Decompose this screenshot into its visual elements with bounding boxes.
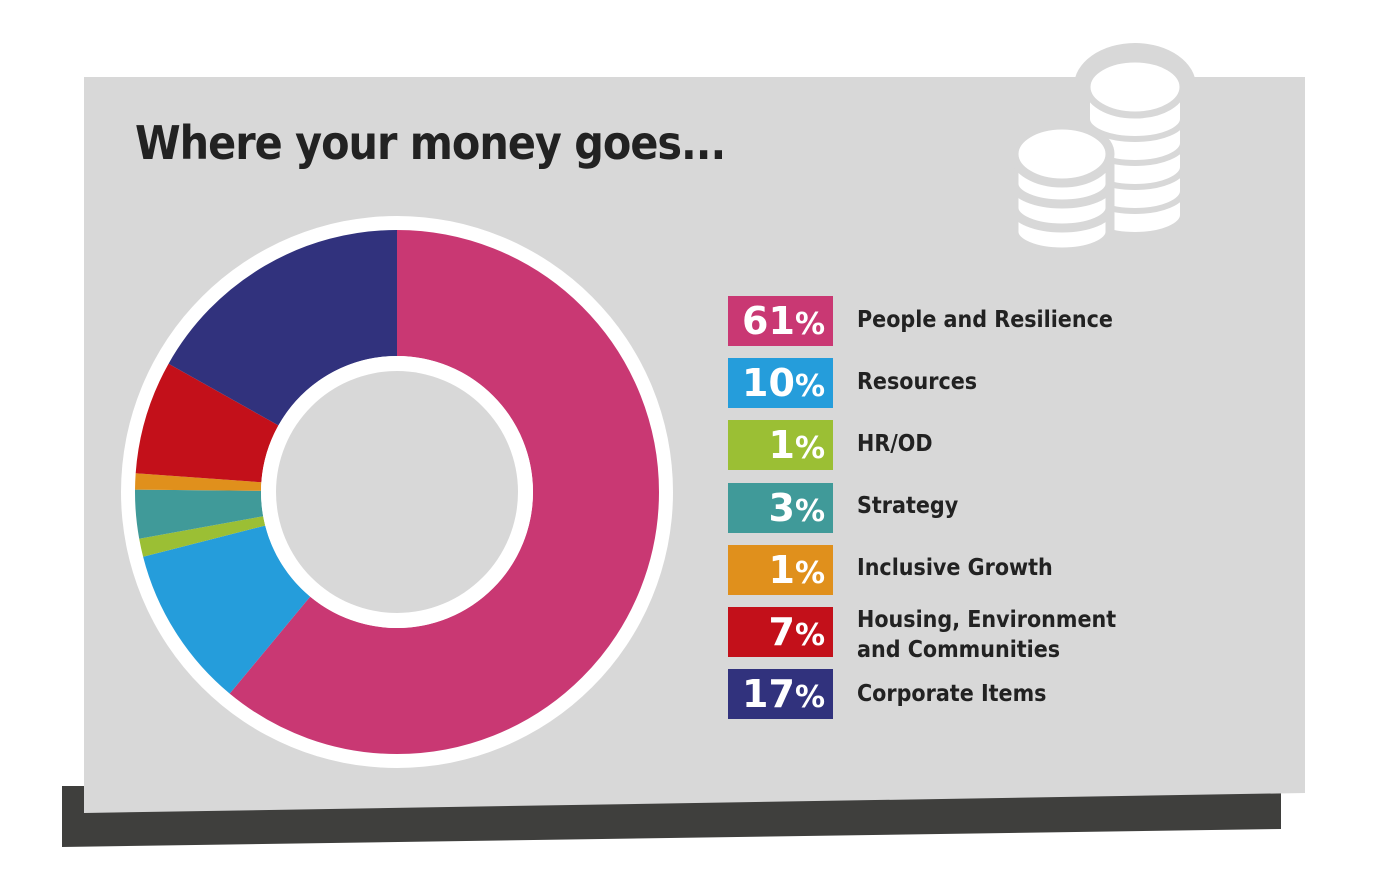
legend: Housing, Environment <box>857 607 1116 633</box>
legend item: Strategy <box>728 483 958 533</box>
legend: 17% <box>742 672 825 716</box>
legend: HR/OD <box>857 431 933 457</box>
legend: 10% <box>742 361 825 405</box>
legend item: Resources <box>728 358 977 408</box>
title: Where your money goes... <box>135 116 725 170</box>
legend item: Inclusive Growth <box>728 545 1053 595</box>
legend <box>728 296 1116 719</box>
legend: 7% <box>768 610 825 654</box>
legend: Strategy <box>857 493 958 519</box>
legend: Resources <box>857 369 977 395</box>
legend: 61% <box>742 299 825 343</box>
legend: and Communities <box>857 637 1060 663</box>
legend item: Housing <box>728 607 1116 663</box>
legend: Corporate Items <box>857 681 1046 707</box>
legend: Inclusive Growth <box>857 555 1053 581</box>
legend: 1% <box>768 548 825 592</box>
legend item: Corporate Items <box>728 669 1046 719</box>
legend item: People and Resilience <box>728 296 1113 346</box>
legend: 1% <box>768 423 825 467</box>
legend: People and Resilience <box>857 307 1113 333</box>
legend: 3% <box>768 486 825 530</box>
donut chart <box>121 216 673 768</box>
icon: coins <box>1014 43 1196 252</box>
legend item: HR/OD <box>728 420 933 470</box>
